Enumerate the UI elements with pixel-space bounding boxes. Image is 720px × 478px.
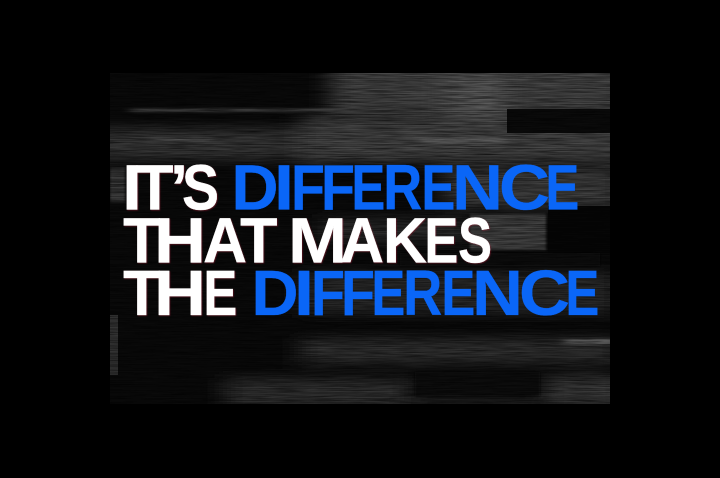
line 3: DIFFERENCE: F [341,257,375,329]
line 3: DIFFERENCE: D [252,257,298,329]
left edge grey patches [110,168,125,202]
headline [122,152,599,329]
poster canvas [110,73,610,404]
line 3: DIFFERENCE: E [565,257,599,329]
light streaks [130,109,615,344]
line 3: THE: T [123,257,160,329]
line 2: THAT MAKES: M [288,204,347,276]
grey block behind second line [470,214,546,250]
line 1: DIFFERENCE: I [274,152,294,224]
line 3: DIFFERENCE: R [403,257,442,329]
line 1: DIFFERENCE: C [499,152,550,224]
line 2: THAT MAKES: T [123,204,160,276]
dark textured background panel [110,73,610,404]
line 3: DIFFERENCE: F [311,257,345,329]
line 1: IT'S: ’ [170,152,188,224]
line 2: THAT MAKES: T [240,204,278,276]
line 3: THE: E [203,257,237,329]
line 2: THAT MAKES: A [203,204,247,276]
line 1: DIFFERENCE: E [421,152,455,224]
line 3: DIFFERENCE: E [371,257,405,329]
dark block bottom [414,383,540,396]
line 3: DIFFERENCE: C [519,257,570,329]
line 2: THAT MAKES: K [383,204,427,276]
line 3: THE: H [154,257,206,329]
line 1: IT'S: T [136,152,174,224]
line 2: THAT MAKES: S [458,204,492,276]
line 1: DIFFERENCE: E [545,152,579,224]
dark block top right [507,109,617,133]
line 1: IT'S: I [122,152,142,224]
line 1: DIFFERENCE: E [351,152,385,224]
line 1: DIFFERENCE: N [452,152,503,224]
line 3: DIFFERENCE: N [472,257,523,329]
soft grey smears [110,73,610,404]
grain overlay [110,73,610,404]
line 1: DIFFERENCE: D [232,152,278,224]
line 1: DIFFERENCE: R [383,152,422,224]
scanline overlay [427,78,610,343]
line 2: THAT MAKES: A [340,204,384,276]
line 2: THAT MAKES: H [154,204,206,276]
line 1: DIFFERENCE: F [291,152,325,224]
dark band lower right [400,253,600,266]
line 1: IT'S: S [182,152,219,224]
line 1: DIFFERENCE: F [321,152,355,224]
line 3: DIFFERENCE: I [294,257,314,329]
line 3: DIFFERENCE: E [441,257,475,329]
line 2: THAT MAKES: E [424,204,458,276]
dark block middle right [548,206,610,216]
